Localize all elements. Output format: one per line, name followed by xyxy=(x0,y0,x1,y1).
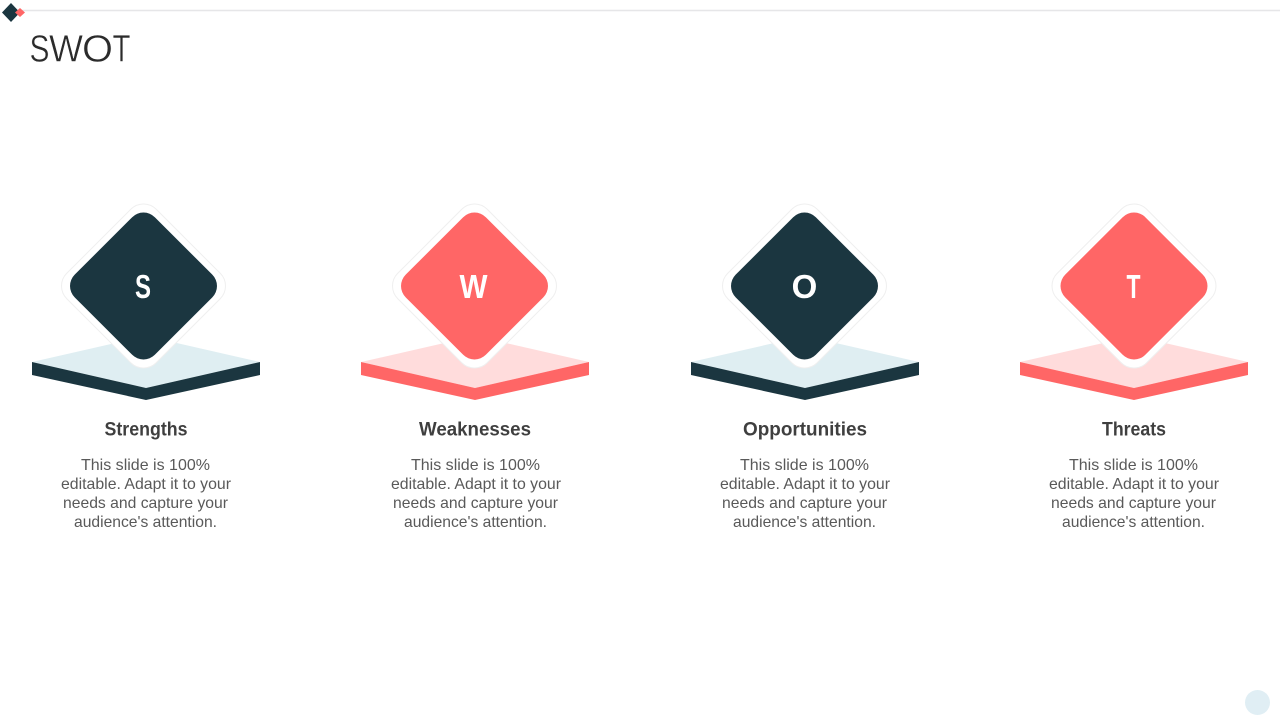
heading: Threats: Threats xyxy=(1102,420,1166,440)
platform: weaknesses xyxy=(361,336,589,400)
text: strengths description: needs and capture your xyxy=(63,495,229,512)
text: strengths description: editable. Adapt it to your xyxy=(61,476,232,493)
text: weaknesses description xyxy=(391,457,562,531)
text: strengths description: audience's attention. xyxy=(74,514,217,531)
text: weaknesses description: editable. Adapt it to your xyxy=(391,476,562,493)
page number circle xyxy=(1245,690,1270,715)
title: W xyxy=(49,28,83,70)
diamond: W xyxy=(385,197,564,375)
diamond: O: O xyxy=(792,268,817,305)
text: threats description xyxy=(1049,457,1220,531)
text: threats description: needs and capture your xyxy=(1051,495,1217,512)
diamond: T: T xyxy=(1126,268,1140,305)
text: threats description: This slide is 100% xyxy=(1069,457,1198,474)
platform: opportunities xyxy=(691,336,919,400)
title: S xyxy=(30,28,50,70)
text: strengths description: This slide is 100% xyxy=(81,457,210,474)
platform: threats xyxy=(1020,336,1248,400)
text: threats description: audience's attention. xyxy=(1062,514,1205,531)
text: opportunities description: editable. Adapt it to your xyxy=(720,476,891,493)
heading: Opportunities: Opportunities xyxy=(743,420,867,440)
diamond: S: S xyxy=(135,268,151,305)
panel: threats xyxy=(1020,197,1248,531)
text: opportunities description: audience's attention. xyxy=(733,514,876,531)
diamond: O xyxy=(715,197,894,375)
diamond: S xyxy=(54,197,233,375)
diamond: W: W xyxy=(460,268,488,305)
title: O xyxy=(82,28,113,70)
panel: opportunities xyxy=(691,197,919,531)
text: strengths description xyxy=(61,457,232,531)
text: weaknesses description: This slide is 100% xyxy=(411,457,540,474)
platform: strengths xyxy=(32,336,260,400)
title: T xyxy=(112,28,130,70)
panel: strengths xyxy=(32,197,260,531)
diamond: T xyxy=(1045,197,1223,375)
heading: Weaknesses: Weaknesses xyxy=(419,420,531,440)
text: weaknesses description: needs and capture your xyxy=(393,495,559,512)
heading: Strengths: Strengths xyxy=(104,420,188,440)
panel: weaknesses xyxy=(361,197,589,531)
text: opportunities description xyxy=(720,457,891,531)
text: opportunities description: needs and capture your xyxy=(722,495,888,512)
text: threats description: editable. Adapt it to your xyxy=(1049,476,1220,493)
icon: header diamonds xyxy=(2,3,25,22)
text: opportunities description: This slide is 100% xyxy=(740,457,869,474)
text: weaknesses description: audience's attention. xyxy=(404,514,547,531)
